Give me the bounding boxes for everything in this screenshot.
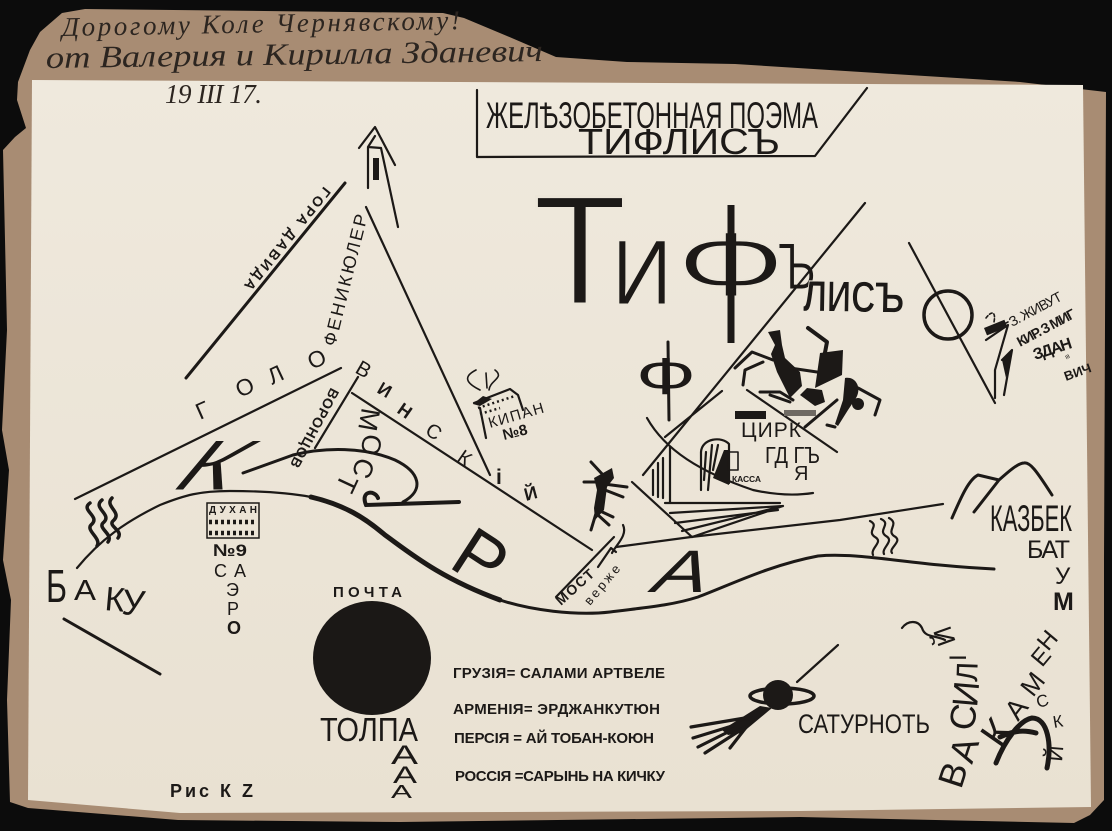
Golovinsky letters: С (421, 419, 446, 445)
Golovinsky bridge letters: М (352, 406, 386, 433)
label: Василий vertical arc: Л (951, 661, 985, 682)
label: Баку: У (120, 581, 148, 624)
legend: АРМЕНІЯ= ЭРДЖАНКУТЮН (453, 701, 660, 718)
label: Василий vertical arc: Й (927, 622, 962, 650)
title box (477, 88, 867, 162)
Golovinsky letters: В (352, 356, 375, 383)
handwritten dedication (46, 5, 543, 75)
river letters: А (641, 539, 726, 605)
Golovinsky letters: Н (394, 399, 416, 423)
river lower bank (77, 491, 994, 613)
Golovinsky bridge letters: С (346, 454, 381, 483)
big word Тифлисъ: И (612, 222, 672, 324)
circus label: ЦИРК (741, 419, 802, 442)
circus label: Я (794, 463, 808, 485)
Golovinsky bridge letters: Т (330, 469, 364, 497)
crowd label: А (391, 782, 412, 802)
Kipan house: КИПАН (486, 400, 546, 432)
Zdanevich note: ВИЧ (1062, 360, 1093, 384)
Kipan house (468, 370, 546, 444)
Zdanevich note: З. ЖИВУТ (1006, 288, 1065, 330)
crowd label (320, 711, 418, 802)
big word Тифлисъ: Ъ (778, 229, 816, 303)
upper river bank left (75, 368, 341, 499)
label: Каменский arc: М (1014, 666, 1051, 702)
bridge Verie (552, 525, 624, 608)
Golovinsky line (352, 393, 592, 550)
circle with slash (909, 243, 995, 403)
title box: ЖЕЛѢЗОБЕТОННАЯ ПОЭМА (486, 95, 818, 136)
label: Баку: К (103, 580, 127, 620)
crowd label: А (393, 762, 417, 789)
Dukhan tavern (207, 503, 259, 560)
river letters (153, 425, 726, 606)
ticket office (701, 439, 761, 490)
label: Каменский arc: Е (1026, 642, 1057, 672)
Zdanevich note (1006, 288, 1093, 384)
label: Василий vertical arc: І (945, 654, 972, 661)
Zdanevich note: ЗДАН (1031, 335, 1074, 364)
crowd label: А (391, 740, 418, 770)
squiggle (902, 622, 945, 640)
Saturn with comet (691, 645, 838, 753)
label: Каменский arc: Н (1032, 625, 1064, 656)
devil figure (584, 462, 627, 530)
upper road right (616, 504, 943, 547)
label: Сатурноть: САТУРНОТЬ (798, 709, 930, 739)
legend (453, 665, 666, 785)
label: Батум (1027, 536, 1074, 616)
Dukhan tavern: №9 (213, 541, 247, 560)
label: Василий vertical arc: И (944, 679, 987, 709)
label: Баку (46, 560, 148, 624)
legend: ПЕРСІЯ = АЙ ТОБАН-КОЮН (454, 729, 654, 747)
label: Баку: А (74, 575, 97, 607)
bridge Verie: верже (581, 562, 623, 608)
legend: ГРУЗІЯ= САЛАМИ АРТВЕЛЕ (453, 665, 665, 682)
David mountain line (186, 183, 345, 378)
handwritten dedication: от Валерия и Кирилла Зданевич (46, 33, 543, 75)
Golovinsky letters: i (496, 466, 502, 489)
label: Гора Давида: ГОРА ДАВИДА (241, 184, 334, 294)
Golovinsky letters: К (453, 446, 476, 471)
ticket office: КАССА (732, 474, 761, 484)
circus label (741, 419, 820, 485)
big word Тифлисъ: ЛИСЪ (803, 272, 905, 323)
circus roof and stage lines (632, 203, 865, 537)
big word Тифлисъ: Т (533, 164, 627, 338)
Zdanevich note: ≡ (1062, 352, 1073, 361)
label: Василий vertical arc (927, 622, 987, 792)
Golovinsky letters: О (303, 343, 330, 375)
waves left (87, 498, 119, 546)
Saero vertical name: Э (226, 580, 239, 600)
big word Тифлисъ: Ф (676, 214, 786, 316)
Saero vertical name (214, 561, 246, 638)
small letter Ф: Ф (636, 348, 696, 406)
Golovinsky bridge letters: О (354, 432, 388, 458)
line under Baku (64, 619, 160, 674)
legend: РОССІЯ =САРЫНЬ НА КИЧКУ (455, 768, 666, 785)
waves right (870, 518, 897, 555)
label: Василий vertical arc: С (941, 701, 985, 733)
small house right (984, 313, 1012, 398)
signature: Рис К Z (170, 781, 253, 801)
church tower (359, 127, 398, 227)
label: Василий vertical arc: В (930, 757, 976, 792)
date: 19 III 17. (165, 79, 262, 109)
label: Офеникюлер: ФЕНИКЮЛЕР (319, 212, 372, 348)
label: Батум: У (1055, 563, 1071, 590)
label: Каменский arc: С (1034, 690, 1051, 712)
Kipan house: №8 (501, 421, 529, 444)
road to tower (366, 207, 490, 475)
Kazbek mountains (952, 463, 1052, 518)
small letter Ф (636, 342, 696, 420)
Saero vertical name: Р (227, 599, 239, 619)
title box: ТИФЛИСЪ (578, 121, 780, 162)
post office disc (313, 584, 431, 715)
handwritten dedication: Дорогому Коле Чернявскому! (59, 5, 460, 42)
Dukhan tavern: ДУХАН (209, 505, 257, 516)
Zdanevich note: КИР. З МИГ (1014, 305, 1078, 350)
Vorontsov line and label: ВОРОНЦОВ (287, 386, 342, 471)
river swoosh (243, 450, 459, 505)
post office disc: ПОЧТА (333, 584, 402, 601)
Golovinsky letters: Л (263, 360, 288, 390)
label: Батум: М (1053, 588, 1074, 616)
Golovinsky letters: Г (191, 396, 214, 425)
label: Каменский arc: К (1051, 711, 1065, 732)
Golovinsky bridge letters (330, 406, 388, 497)
river letters: К (153, 425, 279, 505)
label: Каменский arc (972, 625, 1068, 762)
label: Каменский arc: А (998, 692, 1034, 726)
label: Василий vertical arc: А (941, 732, 987, 767)
Golovinsky letters: Й (522, 481, 540, 505)
horse and rider (735, 328, 880, 452)
Golovinsky letters (191, 343, 540, 505)
Saero vertical name: СА (214, 561, 246, 581)
circus label: ГД ГЪ (765, 442, 820, 468)
label: Каменский arc: К (972, 710, 1022, 755)
bridge Verie: МОСТ (552, 565, 598, 608)
big word Тифлисъ (533, 164, 905, 343)
label: Баку: Б (46, 560, 67, 612)
Golovinsky letters: О (231, 371, 258, 403)
river letters: Р (438, 512, 522, 606)
label: Батум: БАТ (1027, 536, 1070, 564)
Golovinsky letters: И (374, 378, 395, 402)
Saero vertical name: О (227, 618, 241, 638)
crowd label: ТОЛПА (320, 711, 418, 748)
big arc (996, 718, 1049, 768)
label: Каменский arc: Й (1042, 745, 1068, 762)
